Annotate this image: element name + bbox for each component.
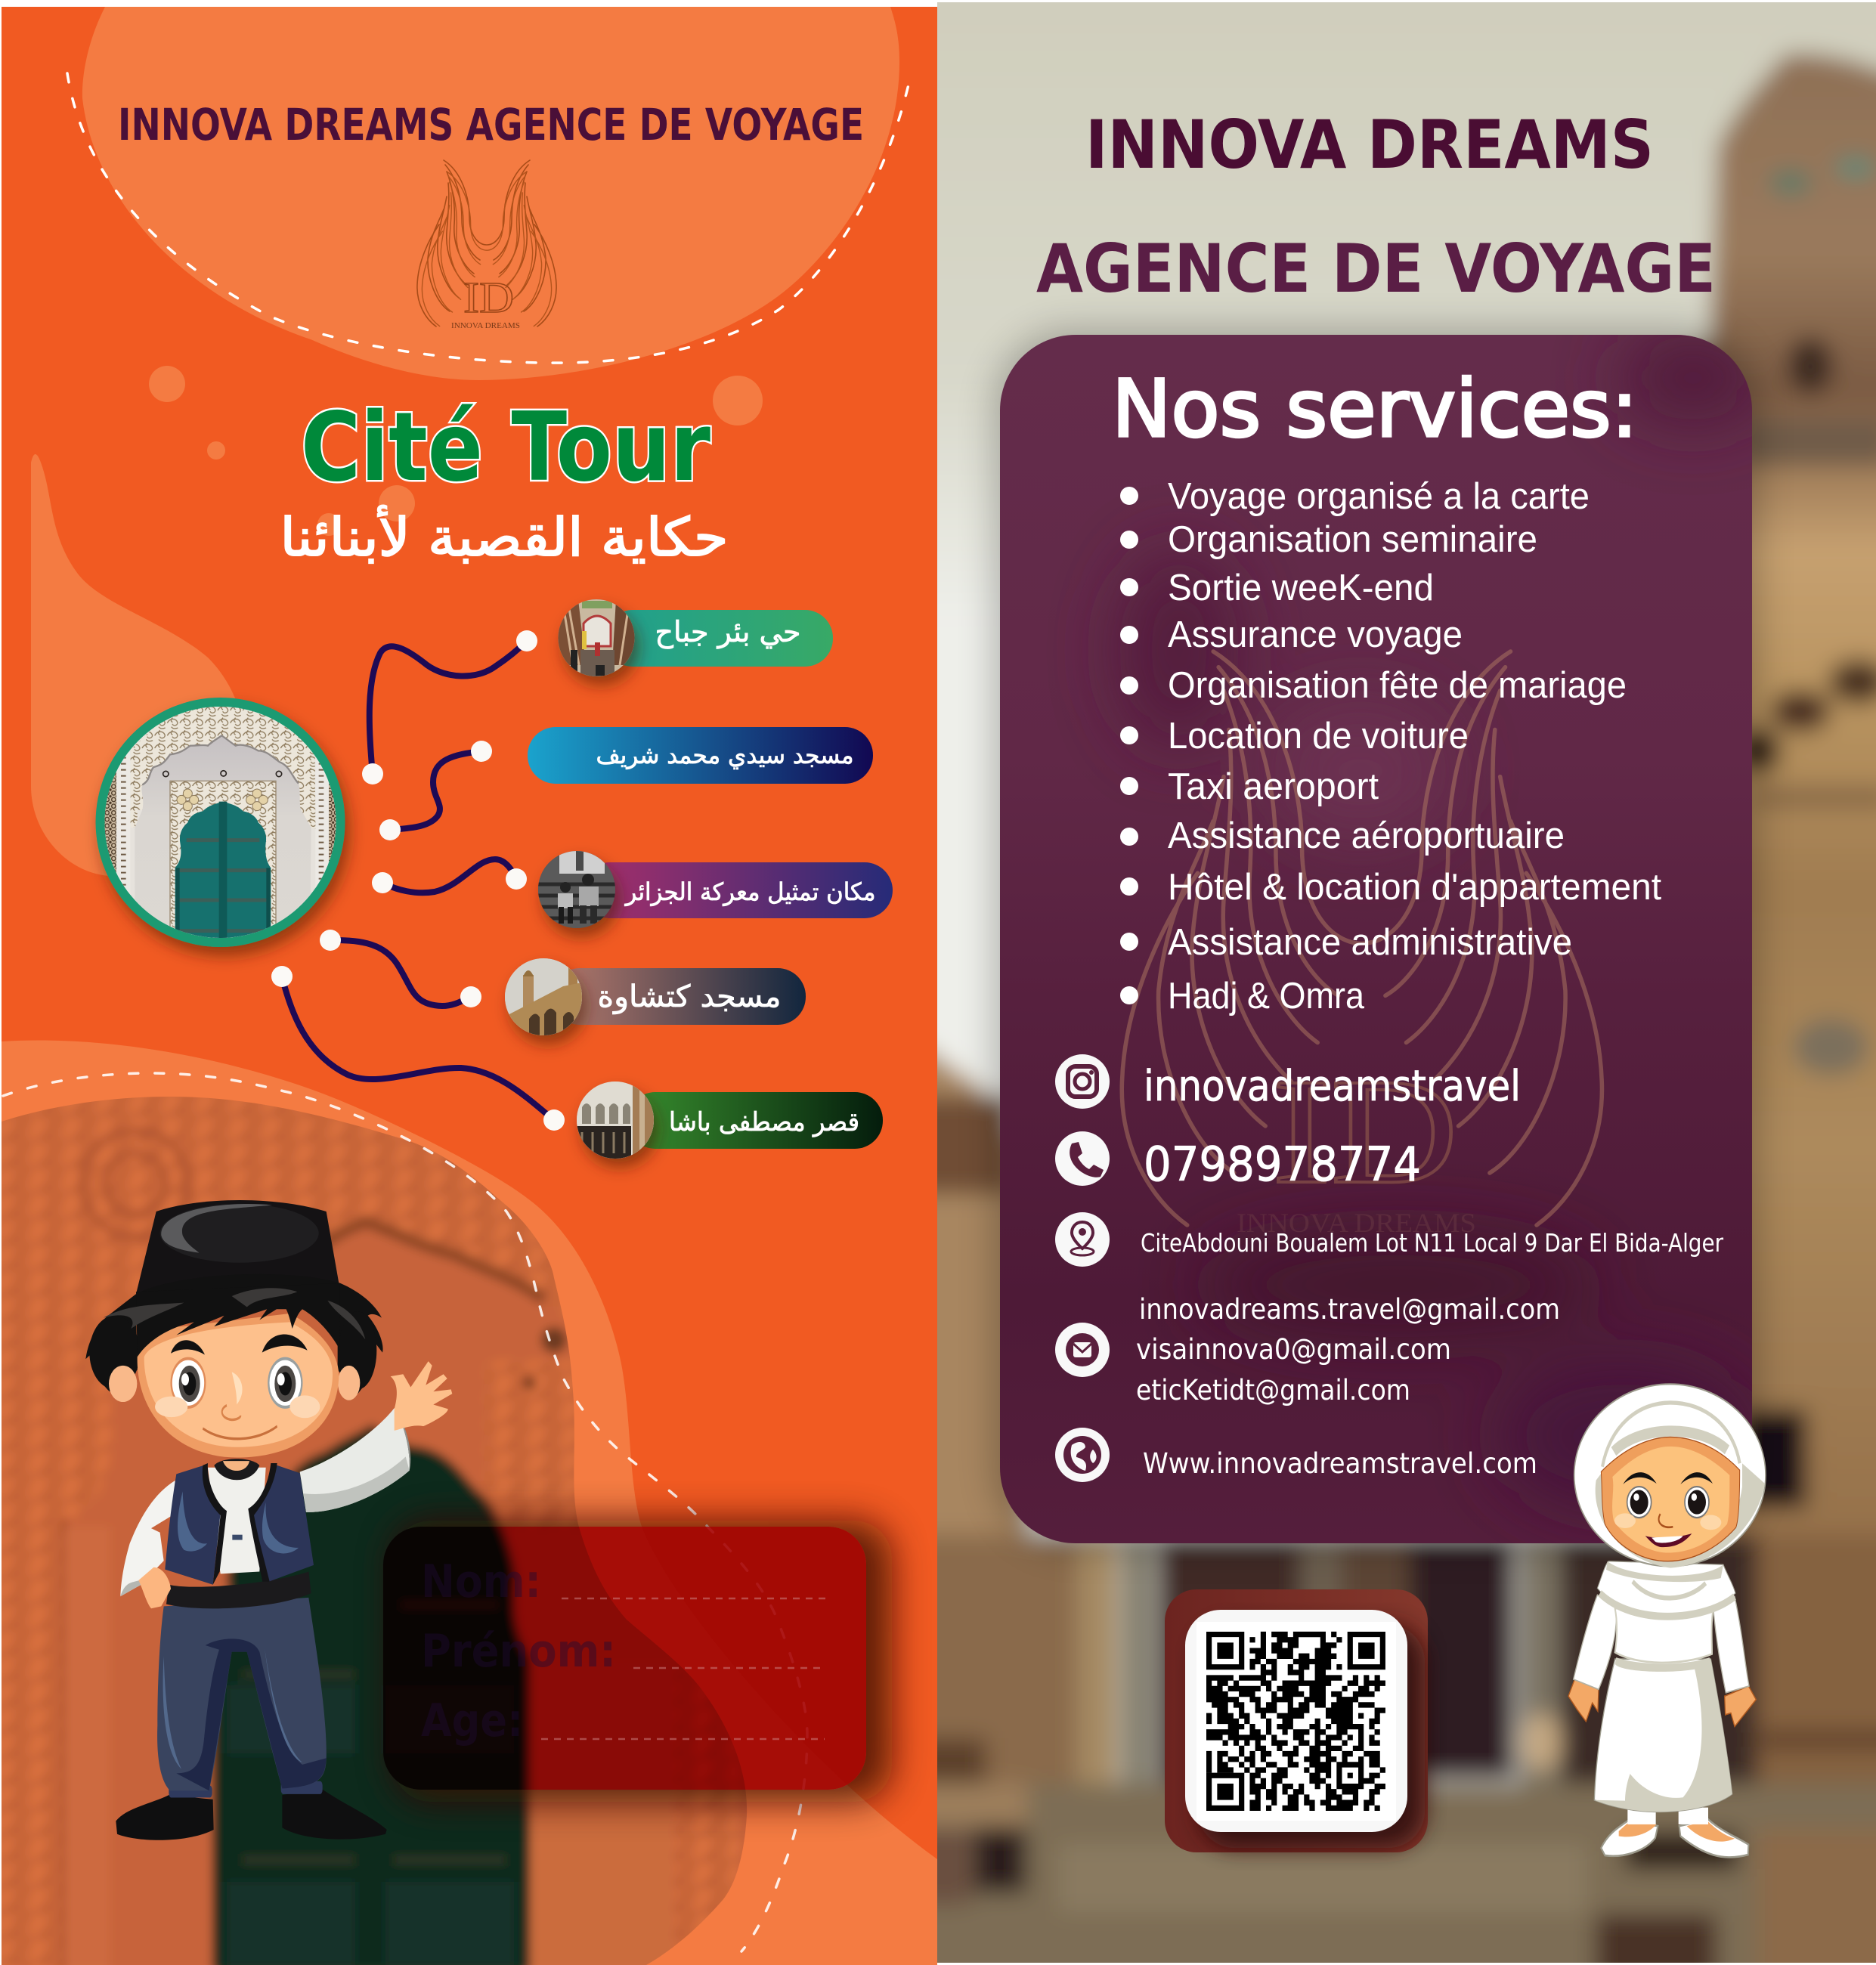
watermark logo [1122, 651, 1602, 1238]
label: مكان تمثيل معركة الجزائر [624, 877, 875, 906]
form fields: name, first name, age: Prénom: [421, 1625, 616, 1678]
panel: right page blurred photo background [907, 0, 1876, 1965]
panel: services card shadow [994, 330, 1758, 1548]
services list: Hôtel & location d'appartement [1168, 867, 1661, 908]
connector dots [271, 630, 565, 1131]
services list: Taxi aeroport [1168, 766, 1379, 807]
lower columns and doorway [907, 1534, 1088, 1791]
logo: Innova Dreams wings: INNOVA DREAMS [451, 321, 520, 330]
label: قصر مصطفى باشا [669, 1107, 859, 1137]
central door medallion [95, 698, 345, 947]
text: email addresses: innovadreams.travel@gmail.com [1139, 1293, 1560, 1326]
text: email addresses: eticKetidt@gmail.com [1136, 1374, 1410, 1406]
text: email addresses [1136, 1293, 1560, 1406]
panel: left orange brochure page [0, 7, 937, 1965]
character: boy in traditional dress [85, 1200, 452, 1840]
dashed curve: bottom [3, 1073, 807, 1951]
text: address: CiteAbdouni Boualem Lot N11 Local 9 Dar El Bida-Alger [1141, 1228, 1723, 1258]
left wavy shape [31, 454, 249, 884]
pill: حي بئر جباح [558, 599, 833, 676]
services list: Hadj & Omra [1168, 976, 1365, 1017]
text: website: Www.innovadreamstravel.com [1143, 1447, 1537, 1480]
watermark logo: INNOVA DREAMS [1237, 1208, 1476, 1238]
bottom light orange wave [2, 1041, 937, 1965]
character: girl in white hijab [1568, 1384, 1766, 1857]
photo: palace [577, 1082, 654, 1159]
services list [1168, 476, 1661, 1017]
services list: Organisation fête de mariage [1168, 665, 1627, 706]
label: حي بئر جباح [655, 615, 801, 649]
form fields: name, first name, age [421, 1555, 831, 1747]
pill: مكان تمثيل معركة الجزائر [538, 851, 893, 928]
photo: mosque [505, 958, 582, 1035]
red form box: shadow [393, 1521, 892, 1802]
dashed curve: top [67, 71, 912, 363]
pill: مسجد كتشاوة [505, 958, 806, 1035]
label: مسجد كتشاوة [597, 979, 782, 1014]
logo: Innova Dreams wings: ID [463, 273, 514, 322]
pill: قصر مصطفى باشا [577, 1082, 883, 1159]
decorative circles [149, 366, 763, 536]
text: instagram handle: innovadreamstravel [1144, 1062, 1521, 1111]
panel: red form box [383, 1527, 866, 1790]
left wall [937, 1040, 1040, 1555]
photo: alley [558, 599, 635, 676]
services list: Voyage organisé a la carte [1168, 476, 1590, 517]
top light orange blob [82, 7, 899, 380]
tower [1689, 41, 1876, 1557]
text: phone number: 0798978774 [1144, 1137, 1421, 1192]
heading: Nos services: Nos services: [1112, 363, 1638, 455]
title: right page line one: INNOVA DREAMS [1085, 106, 1654, 184]
form fields: name, first name, age: Age: [421, 1694, 523, 1747]
icon: location pin [1055, 1212, 1110, 1267]
text: email addresses: visainnova0@gmail.com [1136, 1333, 1451, 1366]
services list: Assistance aéroportuaire [1168, 815, 1565, 856]
watermark logo: ID [1272, 1048, 1458, 1215]
services list: Assistance administrative [1168, 922, 1572, 963]
icon: globe [1055, 1428, 1110, 1482]
heading: Cité Tour: Cité Tour [301, 391, 710, 503]
connector lines [282, 641, 554, 1120]
icon: instagram [1055, 1054, 1110, 1109]
door [212, 1425, 530, 1965]
icon: phone [1055, 1131, 1110, 1186]
subheading: arabic: حكاية القصبة لأبنائنا [280, 505, 729, 568]
QR code [1206, 1632, 1385, 1811]
title: right page line two: AGENCE DE VOYAGE [1036, 230, 1716, 308]
pill: مسجد سيدي محمد شريف [528, 727, 873, 784]
services list: Assurance voyage [1168, 614, 1463, 655]
bullets [1120, 487, 1138, 1004]
title: left page: INNOVA DREAMS AGENCE DE VOYAGE [118, 99, 864, 150]
panel: QR code card [1165, 1589, 1428, 1852]
icon: email [1055, 1323, 1110, 1377]
pill: مسجد سيدي محمد شريف: مسجد سيدي محمد شريف [596, 741, 854, 769]
services list: Sortie weeK-end [1168, 568, 1434, 608]
panel: services card [1000, 333, 1769, 1543]
services list: Location de voiture [1168, 716, 1469, 757]
blurred door photo [0, 1081, 763, 1965]
services list: Organisation seminaire [1168, 519, 1537, 560]
logo: Innova Dreams wings [417, 160, 556, 330]
photo: black and white boys [538, 851, 615, 928]
form fields: name, first name, age: Nom: [421, 1555, 541, 1608]
